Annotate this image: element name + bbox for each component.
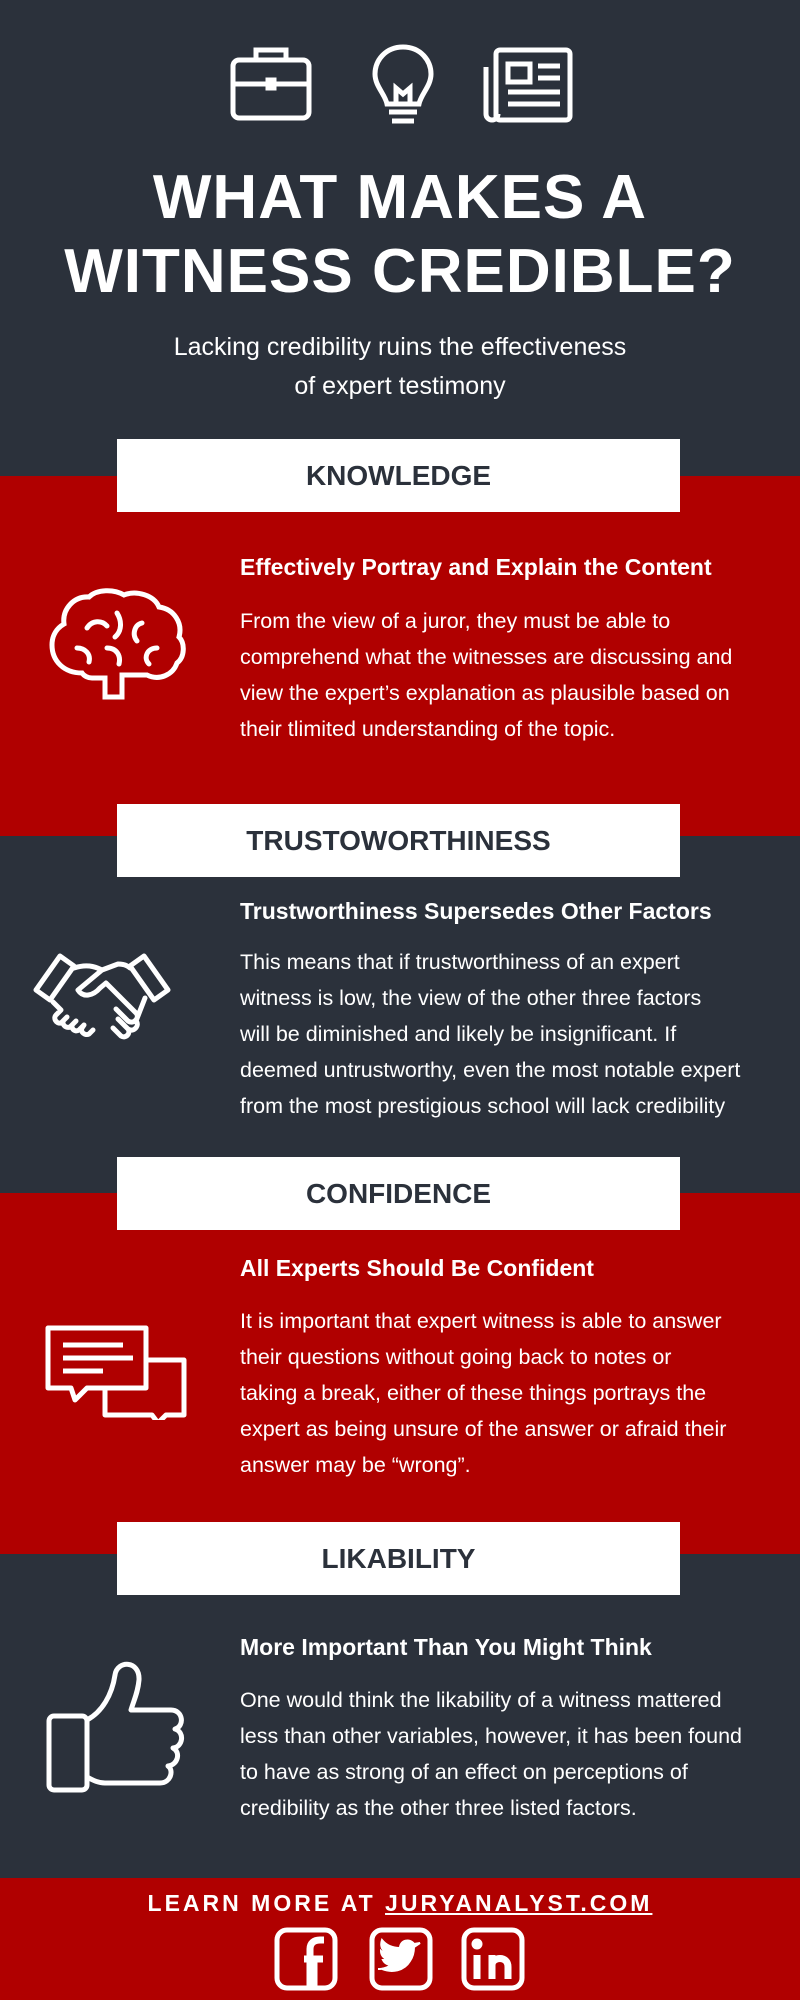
text: confidence: All Experts Should Be Confident — [240, 1255, 594, 1281]
icon: thumbs up — [46, 1662, 184, 1792]
subtitle — [174, 333, 626, 400]
text: trustworthiness: Trustworthiness Supersedes Other Factors — [240, 898, 712, 924]
text: From the view of a juror, they must be able to — [240, 609, 670, 633]
text: This means that if trustworthiness of an expert — [240, 950, 680, 974]
text: likability: More Important Than You Might Think — [240, 1634, 652, 1660]
text: will be diminished and likely be insignificant. If — [240, 1022, 676, 1046]
footer text: LEARN MORE AT JURYANALYST.COM — [148, 1890, 652, 1916]
icon: facebook — [277, 1930, 335, 1988]
icon: chat bubbles — [46, 1326, 186, 1420]
icon: twitter — [372, 1930, 430, 1988]
icon: bulb — [375, 47, 431, 121]
header icons — [230, 44, 572, 124]
text: One would think the likability of a witness mattered — [240, 1688, 722, 1712]
band: footer — [0, 1878, 800, 2000]
text: their tlimited understanding of the topic. — [240, 717, 615, 741]
subtitle: Lacking credibility ruins the effectiveness — [174, 333, 626, 361]
title — [64, 163, 736, 306]
heading box: trustworthiness: TRUSTOWORTHINESS — [246, 825, 551, 856]
band: knowledge — [0, 476, 800, 836]
icon: brain — [50, 588, 186, 700]
title: WHAT MAKES A — [153, 163, 647, 232]
text: knowledge: Effectively Portray and Explain the Content — [240, 554, 712, 580]
text: their questions without going back to notes or — [240, 1345, 671, 1369]
social icons — [274, 1928, 524, 1990]
icon: handshake — [34, 954, 170, 1040]
heading box: likability: LIKABILITY — [322, 1543, 476, 1574]
heading box: knowledge: KNOWLEDGE — [306, 460, 491, 491]
heading box: knowledge — [117, 439, 680, 512]
icon: newspaper — [486, 50, 570, 120]
heading box: confidence — [117, 1157, 680, 1230]
text: It is important that expert witness is able to answer — [240, 1309, 722, 1333]
text: deemed untrustworthy, even the most notable expert — [240, 1058, 740, 1082]
text: view the expert’s explanation as plausible based on — [240, 681, 730, 705]
text: to have as strong of an effect on perceptions of — [240, 1760, 688, 1784]
icon: linkedin — [464, 1930, 522, 1988]
text: comprehend what the witnesses are discussing and — [240, 645, 732, 669]
text: taking a break, either of these things portrays the — [240, 1381, 706, 1405]
heading box: likability — [117, 1522, 680, 1595]
band: confidence — [0, 1193, 800, 1554]
text: witness is low, the view of the other three factors — [240, 986, 701, 1010]
subtitle: of expert testimony — [294, 372, 506, 400]
text: answer may be “wrong”. — [240, 1453, 471, 1477]
title: WITNESS CREDIBLE? — [64, 237, 736, 306]
text: less than other variables, however, it has been found — [240, 1724, 742, 1748]
text: from the most prestigious school will lack credibility — [240, 1094, 725, 1118]
heading box: trustworthiness — [117, 804, 680, 877]
heading box: confidence: CONFIDENCE — [306, 1178, 491, 1209]
text: expert as being unsure of the answer or afraid their — [240, 1417, 726, 1441]
text: credibility as the other three listed factors. — [240, 1796, 637, 1820]
icon: briefcase — [233, 50, 309, 118]
